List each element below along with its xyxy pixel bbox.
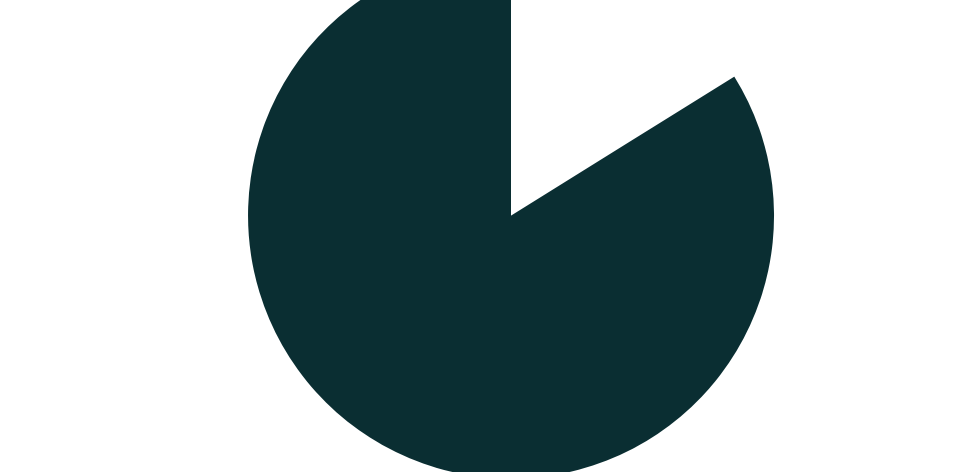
pie slice: large dark segment <box>248 0 774 472</box>
